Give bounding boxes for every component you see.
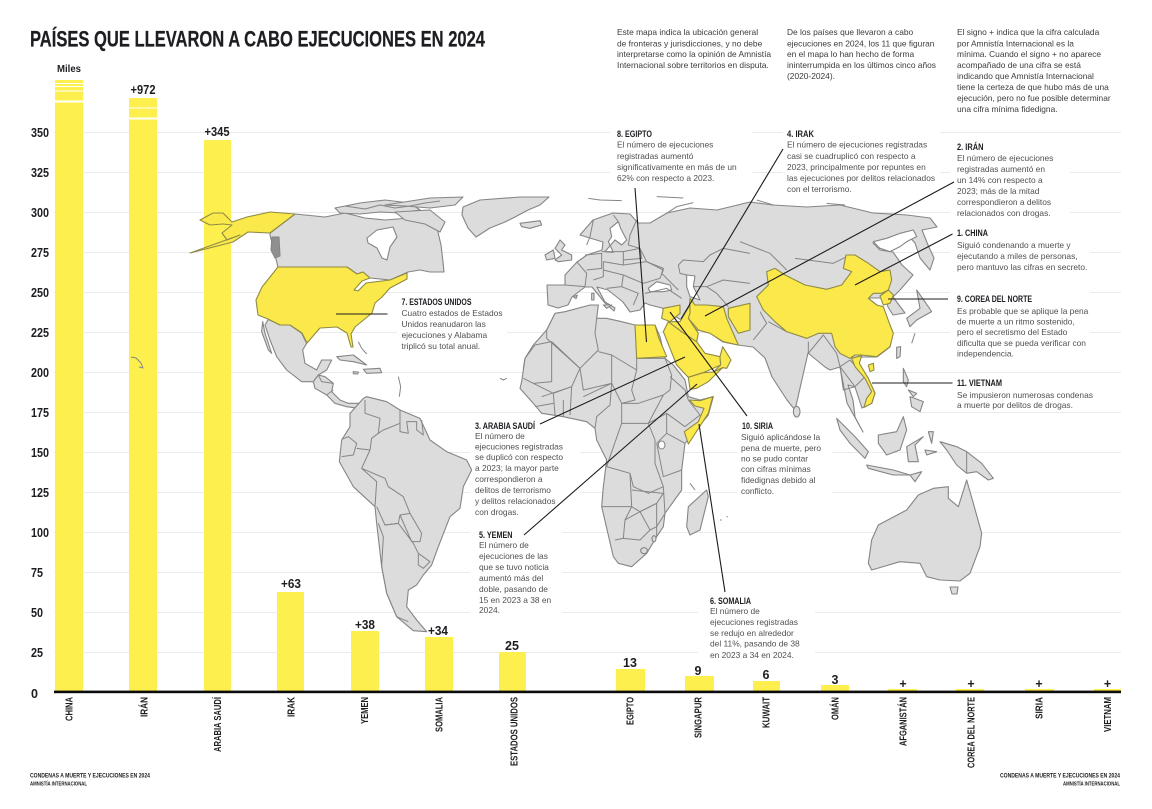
country labels on x axis: AFGANISTÁN bbox=[896, 697, 910, 746]
callout: Vietnam: Se impusieron numerosas condenas bbox=[957, 390, 1093, 400]
text block: countries note: De los países que llevaron a cabo bbox=[787, 27, 914, 37]
callout: Estados Unidos: triplicó su total anual. bbox=[402, 341, 480, 351]
callout: Irak: casi se cuadruplicó con respecto a bbox=[787, 151, 916, 161]
bar chart: +345 bbox=[204, 125, 230, 139]
callout: Irak: El número de ejecuciones registradas bbox=[787, 140, 927, 150]
panel: grid lines and y axis: 150 bbox=[31, 446, 49, 460]
callout: Estados Unidos: Unidos reanudaron las bbox=[402, 319, 486, 329]
callout: Irak: 4. IRAK bbox=[787, 129, 814, 140]
callout: Corea del Norte: Es probable que se aplique la pena bbox=[957, 306, 1089, 316]
callout: Arabia Saudí: correspondieron a bbox=[475, 474, 543, 484]
callout: Egipto: 8. EGIPTO bbox=[617, 129, 652, 140]
callout: Yemen: doble, pasando de bbox=[479, 584, 548, 594]
callout: Corea del Norte: dificulta que se pueda verificar con bbox=[957, 338, 1086, 348]
callout: Siria: fidedignas debido al bbox=[741, 475, 816, 485]
callout: China: Siguió condenando a muerte y bbox=[957, 240, 1071, 250]
callout: Somalia bbox=[710, 596, 800, 660]
callout: Estados Unidos: 7. ESTADOS UNIDOS bbox=[402, 297, 472, 308]
panel: grid lines and y axis: 125 bbox=[31, 486, 49, 500]
callout: Egipto: 62% con respecto a 2023. bbox=[617, 173, 714, 183]
callout: Irak: las ejecuciones por delitos relacionados bbox=[787, 173, 935, 183]
text block: plus sign note: ejecución, pero no fue posible determinar bbox=[957, 93, 1111, 103]
callout: Irán: un 14% con respecto a bbox=[957, 175, 1043, 185]
text block: map disclaimer: Internacional sobre territorios en disputa. bbox=[617, 60, 769, 70]
panel: grid lines and y axis: 200 bbox=[31, 366, 49, 380]
map: United States (highlighted) bbox=[190, 212, 407, 347]
callout: Irak: 2023, principalmente por repuntes en bbox=[787, 162, 926, 172]
footer right: CONDENAS A MUERTE Y EJECUCIONES EN 2024 bbox=[1000, 772, 1120, 780]
panel: grid lines and y axis: 300 bbox=[31, 206, 49, 220]
bar chart: +38 bbox=[355, 618, 375, 632]
callout: Somalia: El número de bbox=[710, 606, 760, 616]
callout: China: ejecutando a miles de personas, bbox=[957, 251, 1078, 261]
panel: grid lines and y axis: 25 bbox=[31, 646, 43, 660]
callout: Siria bbox=[741, 421, 821, 496]
callout: Somalia: en 2023 a 34 en 2024. bbox=[710, 650, 794, 660]
callout: Egipto bbox=[617, 129, 737, 183]
bar chart: +34 bbox=[428, 624, 448, 638]
country labels on x axis bbox=[64, 696, 1114, 768]
map: Africa bbox=[500, 305, 728, 567]
footer left bbox=[30, 772, 150, 788]
callout: Somalia: se redujo en alrededor bbox=[710, 628, 794, 638]
country labels on x axis: IRAK bbox=[286, 696, 298, 717]
bar chart: + bbox=[1035, 677, 1043, 691]
callout: Arabia Saudí: se duplicó con respecto bbox=[475, 452, 563, 462]
panel: world map bbox=[131, 197, 993, 632]
callout: Arabia Saudí: delitos de terrorismo bbox=[475, 485, 551, 495]
callout: Irán: registradas aumentó en bbox=[957, 164, 1045, 174]
bar chart: 13 bbox=[623, 656, 637, 670]
country labels on x axis: ESTADOS UNIDOS bbox=[510, 697, 520, 766]
text block: map disclaimer: interpretarse como la opinión de Amnistía bbox=[617, 49, 771, 59]
callout: Siria: conflicto. bbox=[741, 486, 774, 496]
callout: Egipto: significativamente en más de un bbox=[617, 162, 737, 172]
bar chart: 25 bbox=[505, 639, 519, 653]
callout: Irán bbox=[957, 142, 1053, 218]
callout: Yemen: El número de bbox=[479, 540, 529, 550]
callout: Corea del Norte: pero el secretismo del Estado bbox=[957, 327, 1068, 337]
country labels on x axis: EGIPTO bbox=[626, 697, 636, 725]
panel: grid lines and y axis: 275 bbox=[31, 246, 49, 260]
callout: Yemen: ejecuciones de las bbox=[479, 551, 548, 561]
callout: Irak: con el terrorismo. bbox=[787, 184, 852, 194]
map: South America bbox=[339, 397, 472, 632]
panel: grid lines and y axis: 350 bbox=[31, 126, 49, 140]
callout: Irán: 2. IRÁN bbox=[957, 142, 984, 153]
map: highlighted Middle East and Egypt bbox=[635, 298, 750, 444]
panel: grid lines and y axis: 325 bbox=[31, 166, 49, 180]
callout: Siria: 10. SIRIA bbox=[742, 421, 773, 432]
panel: grid lines and y axis: 50 bbox=[31, 606, 43, 620]
callout: Irak bbox=[787, 129, 935, 194]
country labels on x axis: KUWAIT bbox=[762, 697, 772, 728]
callout: Arabia Saudí: a 2023; la mayor parte bbox=[475, 463, 559, 473]
bar chart: 9 bbox=[695, 664, 702, 678]
panel: grid lines and y axis: 100 bbox=[31, 526, 49, 540]
text block: plus sign note: El signo + indica que la cifra calculada bbox=[957, 27, 1100, 37]
callout: Yemen: aumentó más del bbox=[479, 573, 543, 583]
callout: Arabia Saudí: El número de bbox=[475, 431, 525, 441]
country labels on x axis: YEMEN bbox=[360, 697, 371, 724]
callout: Corea del Norte: independencia. bbox=[957, 348, 1014, 358]
callout: Yemen: 5. YEMEN bbox=[479, 530, 513, 541]
text block: map disclaimer: de fronteras y jurisdicciones, y no debe bbox=[617, 38, 763, 48]
bar chart: +63 bbox=[281, 577, 301, 591]
map: China, North Korea and Vietnam (highlighted) bbox=[757, 255, 893, 407]
text block: plus sign note: por Amnistía Internacional es la bbox=[957, 38, 1074, 48]
map: North America bbox=[131, 197, 549, 408]
text block: plus sign note: una cifra mínima fidedigna. bbox=[957, 104, 1058, 114]
panel: grid lines and y axis: 0 bbox=[31, 687, 38, 701]
callout: Yemen bbox=[479, 530, 552, 615]
bar chart: + bbox=[967, 677, 975, 691]
country labels on x axis: SINGAPUR bbox=[694, 696, 704, 738]
text block: countries note: ejecuciones en 2024, los 11 que figuran bbox=[787, 38, 935, 48]
text block: plus sign note: indicando que Amnistía Internacional bbox=[957, 71, 1094, 81]
text block: plus sign note: acompañado de una cifra se está bbox=[957, 60, 1081, 70]
callout: Estados Unidos bbox=[402, 297, 503, 351]
callout: China bbox=[957, 228, 1087, 272]
callout: Irán: 2023; más de la mitad bbox=[957, 186, 1040, 196]
map: Indonesia, New Guinea and Australia bbox=[837, 417, 993, 581]
bar chart bbox=[54, 80, 1121, 693]
callout: Estados Unidos: ejecuciones y Alabama bbox=[402, 330, 488, 340]
callout: Siria: pena de muerte, pero bbox=[741, 443, 821, 453]
text block: countries note: (2020-2024). bbox=[787, 71, 835, 81]
callout: Siria: con cifras mínimas bbox=[741, 464, 811, 474]
callout: Vietnam bbox=[957, 378, 1093, 410]
callout: Siria: no se pudo contar bbox=[741, 454, 808, 464]
country labels on x axis: COREA DEL NORTE bbox=[966, 697, 978, 768]
bar chart: +972 bbox=[130, 83, 156, 97]
callout: Siria: Siguió aplicándose la bbox=[741, 432, 820, 442]
callout: Egipto: El número de ejecuciones bbox=[617, 140, 713, 150]
country labels on x axis: VIETNAM bbox=[1103, 697, 1114, 732]
callout: China: 1. CHINA bbox=[957, 228, 988, 239]
callout: Somalia: ejecuciones registradas bbox=[710, 617, 798, 627]
bar chart: + bbox=[1104, 677, 1111, 691]
callout: Yemen: que se tuvo noticia bbox=[479, 562, 549, 572]
bar chart: 6 bbox=[763, 668, 770, 682]
country labels on x axis: CHINA bbox=[64, 697, 76, 721]
callout: Irán: El número de ejecuciones bbox=[957, 153, 1053, 163]
title: PAÍSES QUE LLEVARON A CABO EJECUCIONES EN 2024 bbox=[30, 26, 486, 52]
callout: Irán: relacionados con drogas. bbox=[957, 208, 1051, 218]
callout: Somalia: 6. SOMALIA bbox=[710, 596, 751, 607]
callout: Arabia Saudí: y delitos relacionados bbox=[475, 496, 556, 506]
map: Eurasia bbox=[520, 197, 937, 432]
leader lines bbox=[336, 149, 954, 592]
callout: Irán: correspondieron a delitos bbox=[957, 197, 1051, 207]
footer right bbox=[1000, 772, 1120, 788]
panel: grid lines and y axis: 75 bbox=[31, 566, 43, 580]
text block: countries note: ininterrumpida en los últimos cinco años bbox=[787, 60, 936, 70]
callout: Arabia Saudí bbox=[475, 421, 563, 517]
panel: grid lines and y axis: 250 bbox=[31, 286, 49, 300]
callout: China: pero mantuvo las cifras en secreto. bbox=[957, 262, 1087, 272]
footer left: CONDENAS A MUERTE Y EJECUCIONES EN 2024 bbox=[30, 772, 150, 780]
panel: grid lines and y axis: 175 bbox=[31, 406, 49, 420]
footer right: AMNISTÍA INTERNACIONAL bbox=[1063, 780, 1120, 788]
callout: Estados Unidos: Cuatro estados de Estados bbox=[402, 308, 503, 318]
bar chart: 3 bbox=[832, 673, 839, 687]
text block: plus sign note: mínima. Cuando el signo + no aparece bbox=[957, 49, 1101, 59]
callout: Corea del Norte bbox=[957, 294, 1089, 358]
callout: Yemen: 15 en 2023 a 38 en bbox=[479, 595, 552, 605]
callout: Vietnam: a muerte por delitos de drogas. bbox=[957, 400, 1073, 410]
text block: countries note: en el mapa lo han hecho de forma bbox=[787, 49, 914, 59]
callout: Egipto: registradas aumentó bbox=[617, 151, 694, 161]
text block: map disclaimer: Este mapa indica la ubicación general bbox=[617, 27, 758, 37]
panel: grid lines and y axis: Miles bbox=[57, 64, 81, 75]
panel: grid lines and y axis: 225 bbox=[31, 326, 49, 340]
callout: Yemen: 2024. bbox=[479, 605, 500, 615]
country labels on x axis: IRÁN bbox=[138, 697, 150, 717]
country labels on x axis: OMÁN bbox=[828, 697, 842, 720]
country labels on x axis: SIRIA bbox=[1034, 697, 1046, 719]
callout: Vietnam: 11. VIETNAM bbox=[957, 378, 1002, 389]
callout: Corea del Norte: de muerte a un ritmo sostenido, bbox=[957, 316, 1075, 326]
country labels on x axis: ARABIA SAUDÍ bbox=[211, 697, 224, 752]
callout: Arabia Saudí: ejecuciones registradas bbox=[475, 442, 563, 452]
callout: Corea del Norte: 9. COREA DEL NORTE bbox=[957, 294, 1032, 305]
panel: grid lines and y axis bbox=[31, 64, 1121, 701]
callout: Arabia Saudí: 3. ARABIA SAUDÍ bbox=[475, 421, 535, 432]
country labels on x axis: SOMALIA bbox=[434, 697, 446, 732]
text block: plus sign note: tiene la certeza de que hubo más de una bbox=[957, 82, 1109, 92]
bar chart: + bbox=[899, 677, 907, 691]
callout: Arabia Saudí: con drogas. bbox=[475, 507, 519, 517]
footer left: AMNISTÍA INTERNACIONAL bbox=[30, 780, 87, 788]
callout: Somalia: del 11%, pasando de 38 bbox=[710, 638, 800, 648]
